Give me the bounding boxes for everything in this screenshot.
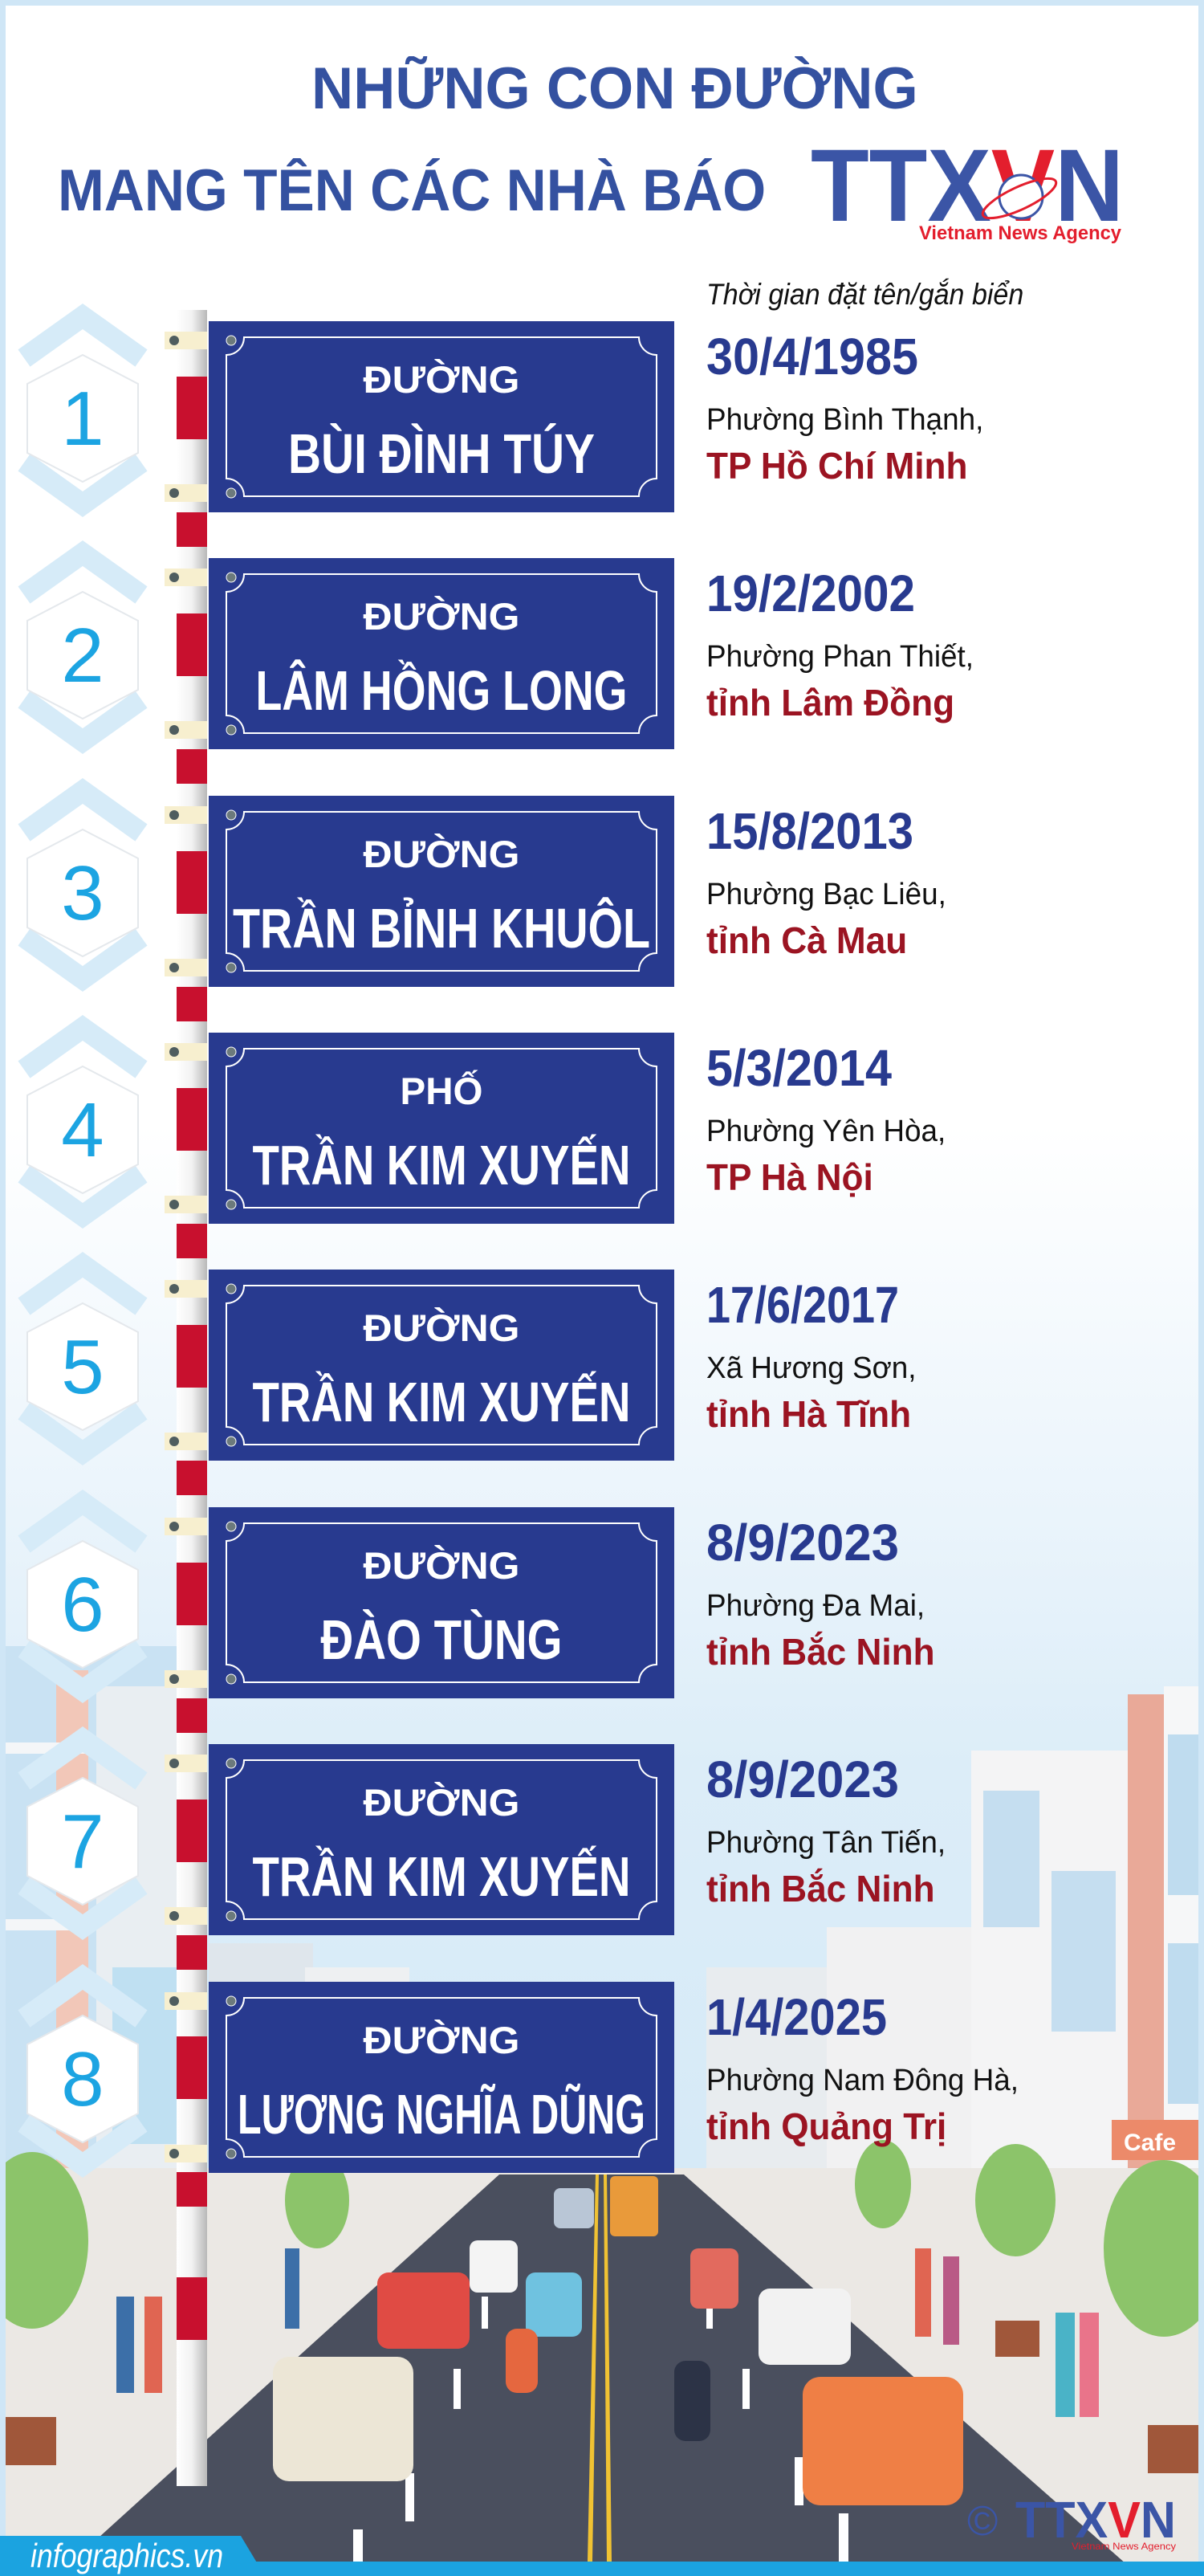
copyright logo: ©: [967, 2498, 998, 2545]
footer bar: [0, 2536, 1204, 2576]
location: Phường Nam Đông Hà,: [706, 2064, 1019, 2097]
sign: ĐƯỜNG: [363, 1306, 520, 1349]
row 5: [18, 1252, 917, 1465]
hexagon number 5: 5: [61, 1324, 104, 1410]
logo: TTXVN: Vietnam News Agency: [919, 222, 1122, 244]
hexagon number 6: [18, 1490, 148, 1703]
date: 17/6/2017: [706, 1276, 899, 1334]
sign: [209, 1270, 674, 1461]
clamps: [165, 332, 207, 349]
sign: ĐÀO TÙNG: [321, 1608, 562, 1671]
hexagon number 7: 7: [61, 1799, 104, 1885]
copyright logo: Vietnam News Agency: [1072, 2541, 1176, 2552]
row 4: TP Hà Nội: [706, 1156, 873, 1198]
date: 15/8/2013: [706, 802, 913, 860]
city scene background: Cafe: [1124, 2130, 1176, 2156]
center lines: [588, 2175, 599, 2562]
row 8: [18, 1964, 1019, 2178]
sign: ĐƯỜNG: [363, 595, 520, 638]
sign: ĐƯỜNG: [363, 1781, 520, 1824]
hexagon number 7: [18, 1726, 148, 1940]
date: 5/3/2014: [706, 1039, 892, 1097]
row 4: [18, 1015, 946, 1229]
trees: [0, 2140, 1204, 2337]
row 7: tỉnh Bắc Ninh: [706, 1868, 935, 1910]
hexagon number 1: 1: [61, 376, 104, 462]
sign: [209, 558, 674, 749]
row 8: tỉnh Quảng Trị: [706, 2105, 946, 2147]
right buildings: [971, 1751, 1132, 2272]
left buildings: [0, 1646, 201, 2369]
sign: [209, 321, 674, 512]
clamps: [165, 1043, 207, 1061]
hexagon number 8: [18, 1964, 148, 2178]
clamps: [165, 806, 207, 824]
sign: [209, 796, 674, 987]
date: 8/9/2023: [706, 1751, 899, 1808]
hexagon number 1: [18, 304, 148, 517]
location: Phường Đa Mai,: [706, 1589, 925, 1623]
row 1: TP Hồ Chí Minh: [706, 445, 967, 487]
cars: [554, 2188, 594, 2228]
hexagon number 4: [18, 1015, 148, 1229]
hexagon number 8: 8: [61, 2036, 104, 2122]
sign: [209, 1507, 674, 1698]
sidewalk: [0, 2168, 1204, 2576]
row 3: tỉnh Cà Mau: [706, 919, 907, 961]
sign: ĐƯỜNG: [363, 358, 520, 401]
clamps: [165, 1280, 207, 1298]
sign: ĐƯỜNG: [363, 1544, 520, 1587]
title: NHỮNG CON ĐƯỜNG: [311, 56, 918, 121]
middle far buildings: [209, 1943, 313, 2184]
sign: [209, 1033, 674, 1224]
sign: ĐƯỜNG: [363, 833, 520, 875]
location: Phường Yên Hòa,: [706, 1115, 946, 1148]
hexagon number 3: 3: [61, 850, 104, 936]
city scene background: [6, 1646, 1198, 2562]
sign: [209, 1744, 674, 1935]
hexagon number 6: 6: [61, 1562, 104, 1648]
title: [58, 56, 918, 223]
sign: BÙI ĐÌNH TÚY: [288, 422, 595, 485]
sign: PHỐ: [400, 1070, 483, 1112]
subtitle: Thời gian đặt tên/gắn biển: [706, 278, 1023, 311]
date: 8/9/2023: [706, 1514, 899, 1571]
row 6: [18, 1490, 935, 1703]
location: Phường Phan Thiết,: [706, 640, 974, 674]
location: Phường Bình Thạnh,: [706, 403, 983, 437]
hexagon number 2: [18, 540, 148, 754]
people: [116, 2248, 1099, 2417]
row 1: [18, 304, 983, 517]
date: 30/4/1985: [706, 328, 918, 385]
hexagon number 2: 2: [61, 613, 104, 699]
sign: [209, 1982, 674, 2173]
location: Phường Bạc Liêu,: [706, 878, 946, 911]
clamps: [165, 569, 207, 586]
date: 19/2/2002: [706, 565, 915, 622]
hexagon number 3: [18, 778, 148, 992]
hexagon number 5: [18, 1252, 148, 1465]
row 2: tỉnh Lâm Đồng: [706, 682, 954, 723]
location: Xã Hương Sơn,: [706, 1351, 917, 1385]
location: Phường Tân Tiến,: [706, 1826, 946, 1860]
date: 1/4/2025: [706, 1988, 887, 2046]
clamps: [165, 1992, 207, 2010]
lane dashes: [353, 2297, 848, 2574]
sign: ĐƯỜNG: [363, 2019, 520, 2061]
clamps: [165, 1755, 207, 1772]
footer text: infographics.vn: [31, 2537, 223, 2574]
title: MANG TÊN CÁC NHÀ BÁO: [58, 158, 766, 223]
clamps: [165, 1518, 207, 1535]
row 6: tỉnh Bắc Ninh: [706, 1631, 935, 1673]
road: [56, 2175, 1140, 2576]
row 7: [18, 1726, 946, 1940]
row 5: tỉnh Hà Tĩnh: [706, 1393, 911, 1435]
row 2: [18, 540, 974, 754]
pole: [177, 310, 207, 2486]
hexagon number 4: 4: [61, 1087, 104, 1173]
row 3: [18, 778, 946, 992]
